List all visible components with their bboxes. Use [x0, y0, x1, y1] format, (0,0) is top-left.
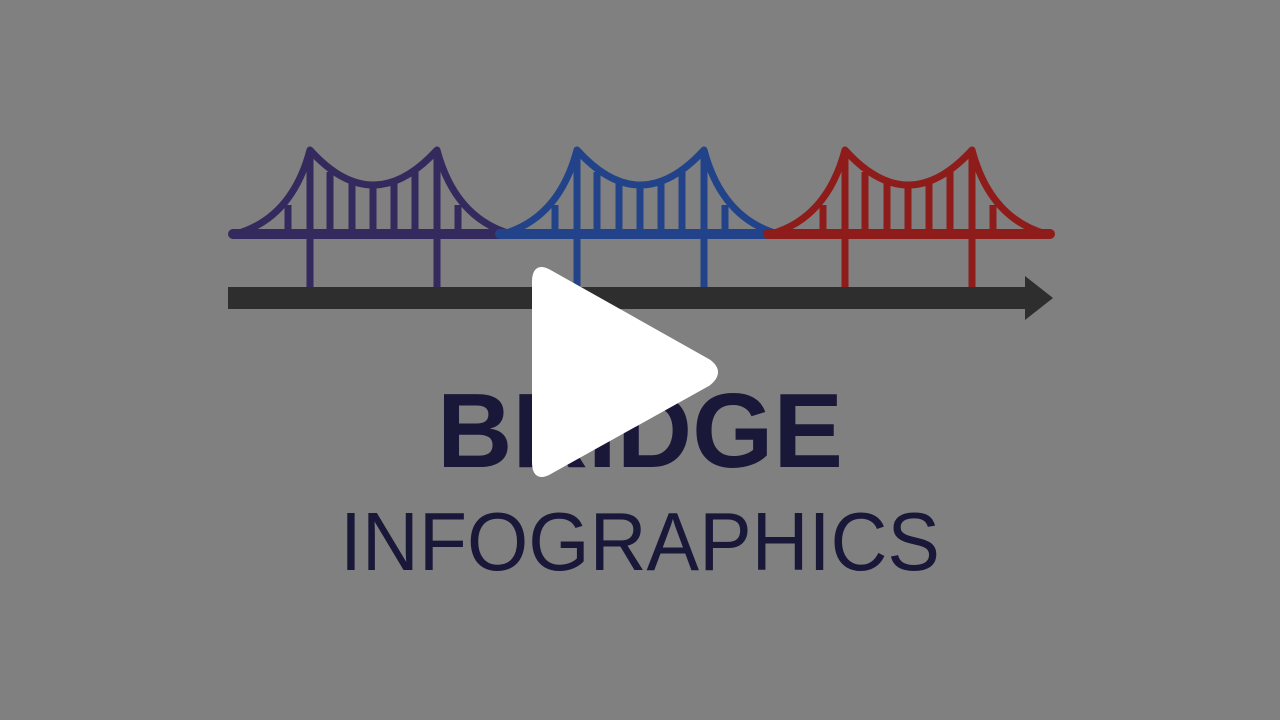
icon: play button [535, 270, 715, 474]
bridge: red [768, 150, 1050, 287]
title: BRIDGE: BRIDGE [437, 372, 843, 490]
bridge: blue [500, 150, 782, 287]
arrow: timeline [228, 276, 1053, 320]
subtitle: INFOGRAPHICS: INFOGRAPHICS [340, 495, 940, 588]
bridge: purple [233, 150, 515, 287]
